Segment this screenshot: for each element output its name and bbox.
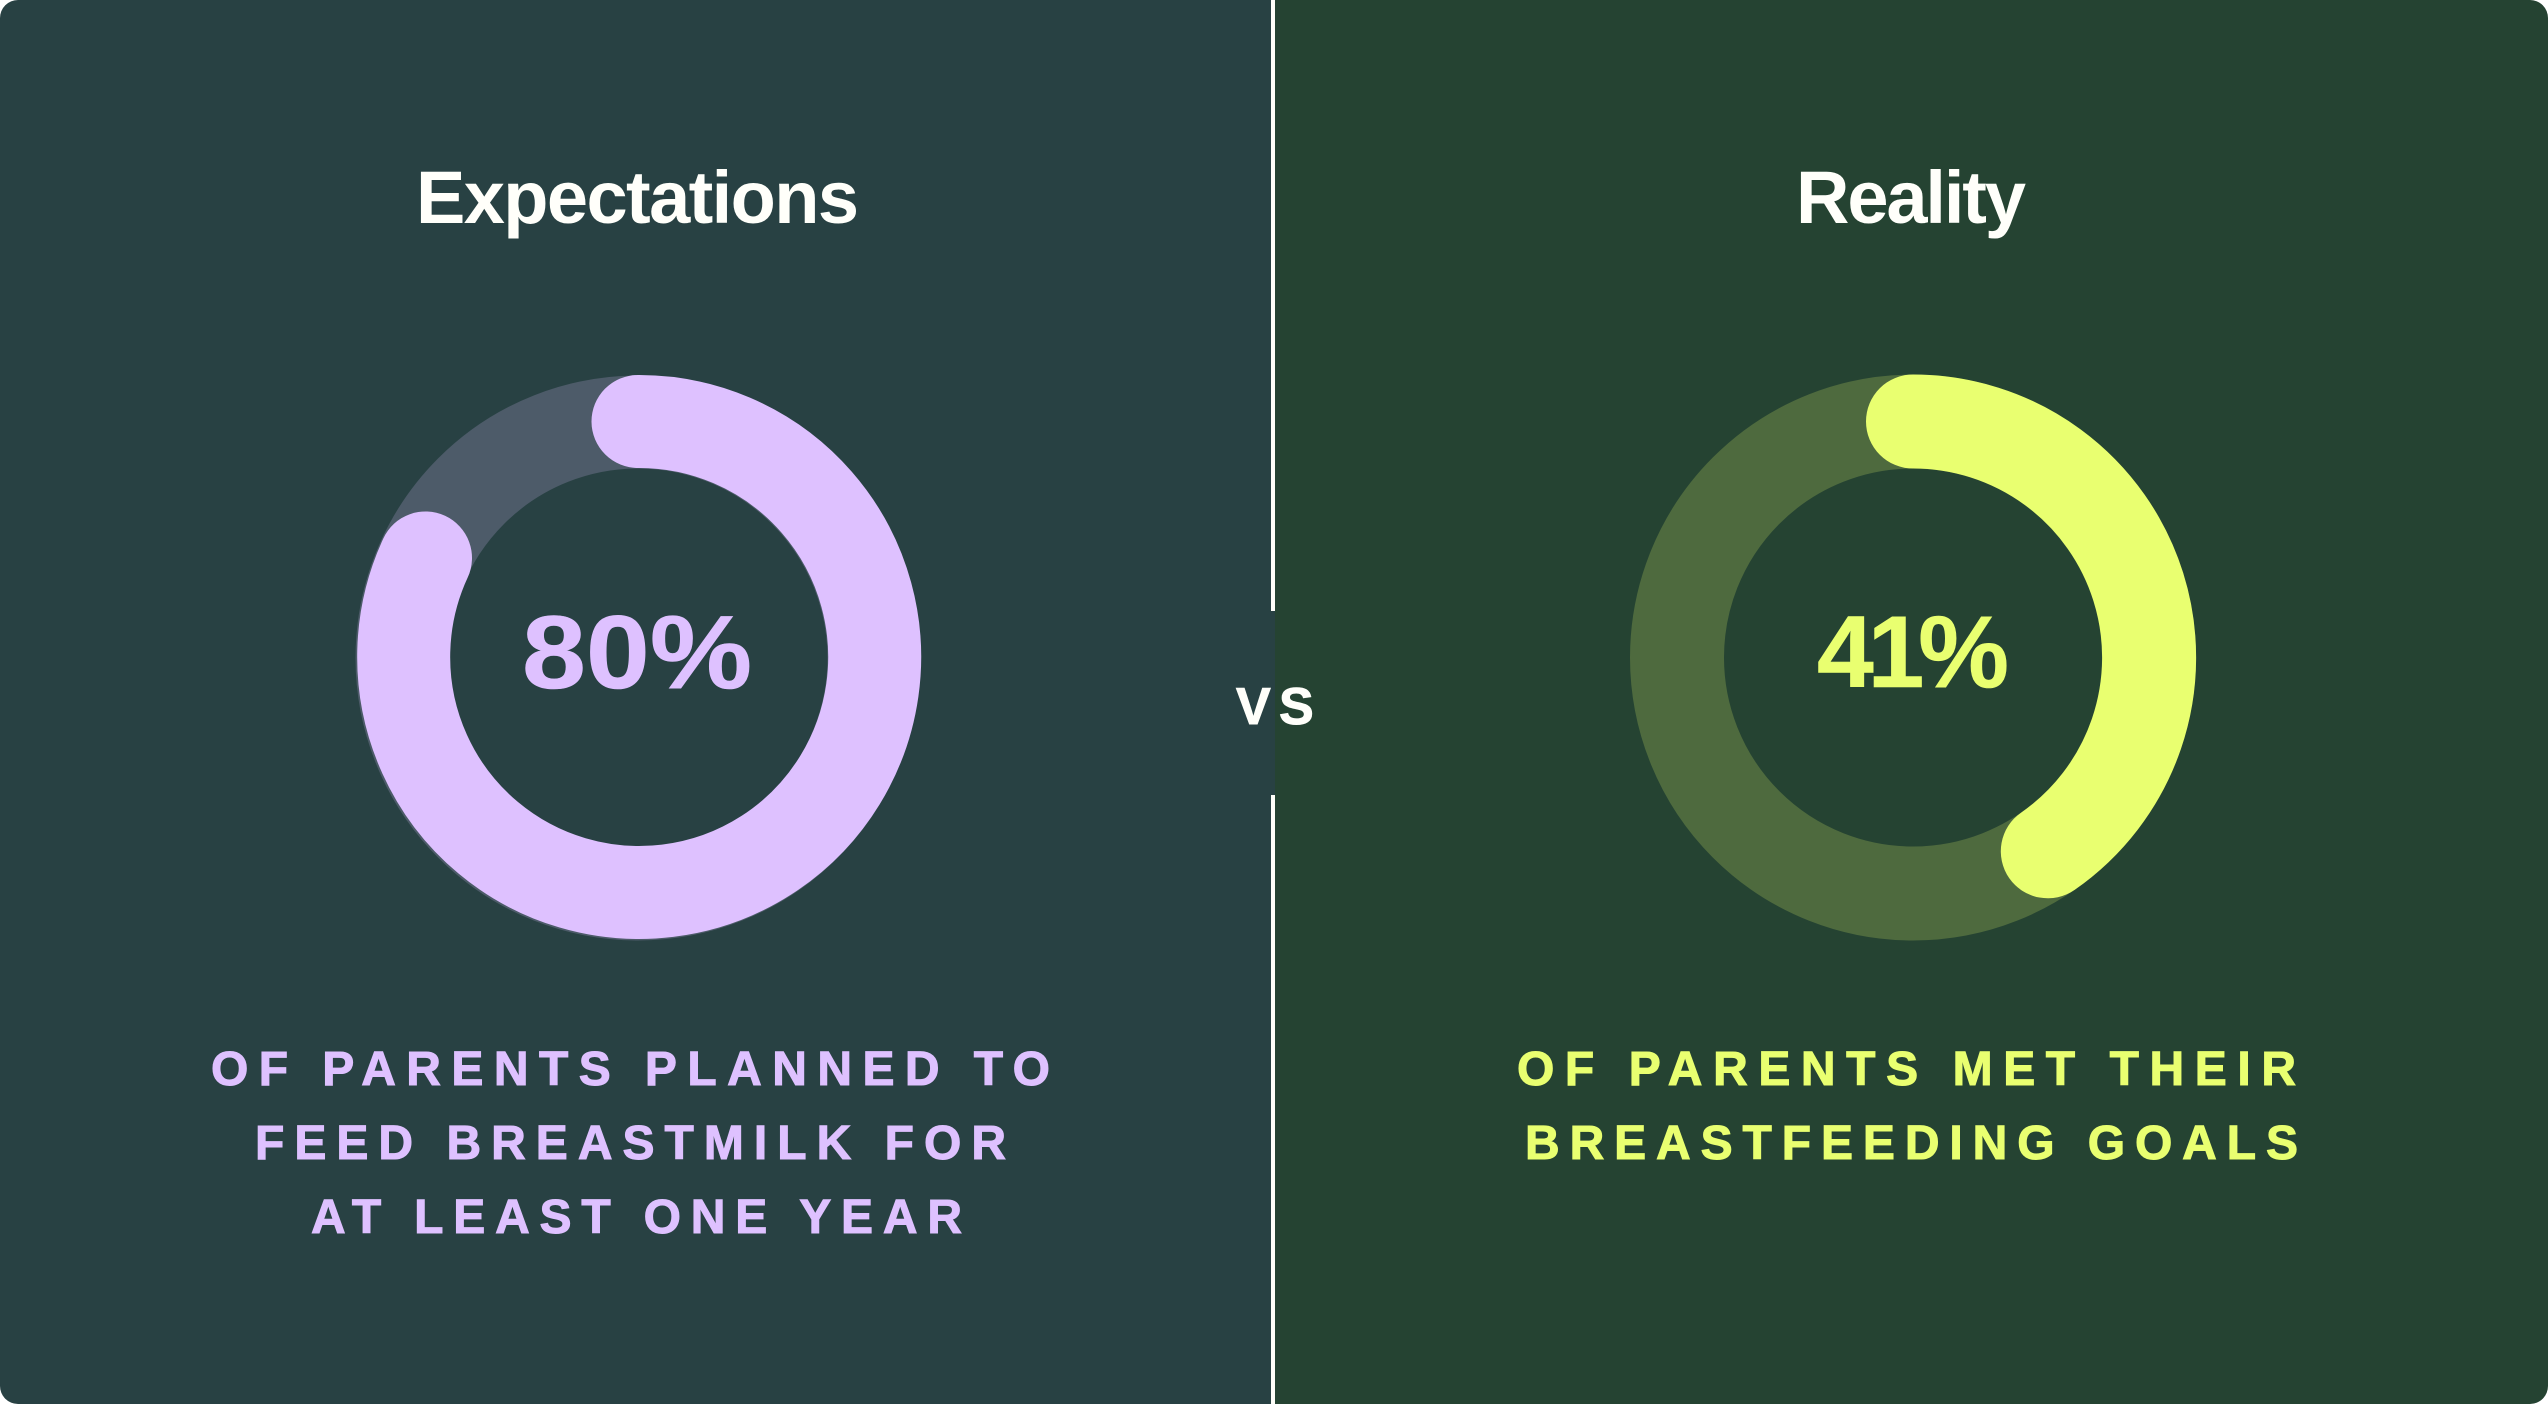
donut track — [402, 422, 874, 894]
donut chart: 80% — [402, 421, 875, 894]
description line 3: AT LEAST ONE YEAR — [311, 1191, 962, 1244]
vs label: VS — [1236, 678, 1314, 736]
center divider — [1271, 0, 1275, 1404]
panel: reality — [1275, 0, 2548, 1404]
panel: expectations — [0, 0, 1275, 1404]
description line 1: OF PARENTS MET THEIR — [1517, 1043, 2296, 1096]
donut value arc — [1913, 421, 2149, 851]
panel background: reality — [1275, 0, 2548, 1404]
donut value arc — [404, 421, 875, 892]
heading: Expectations: Expectations — [416, 156, 859, 239]
donut chart: 41% — [1677, 421, 2149, 894]
description line 1: OF PARENTS PLANNED TO — [211, 1043, 1050, 1096]
description line 2: FEED BREASTMILK FOR — [255, 1117, 1006, 1170]
value: 80%: 80% — [522, 595, 752, 711]
value: 41%: 41% — [1817, 595, 2009, 709]
panel background: expectations — [0, 0, 1275, 1404]
heading: Reality: Reality — [1796, 156, 2026, 239]
description line 2: BREASTFEEDING GOALS — [1525, 1117, 2298, 1170]
description: expectations — [211, 1043, 1050, 1244]
description: reality — [1517, 1043, 2298, 1170]
donut track — [1677, 422, 2149, 894]
